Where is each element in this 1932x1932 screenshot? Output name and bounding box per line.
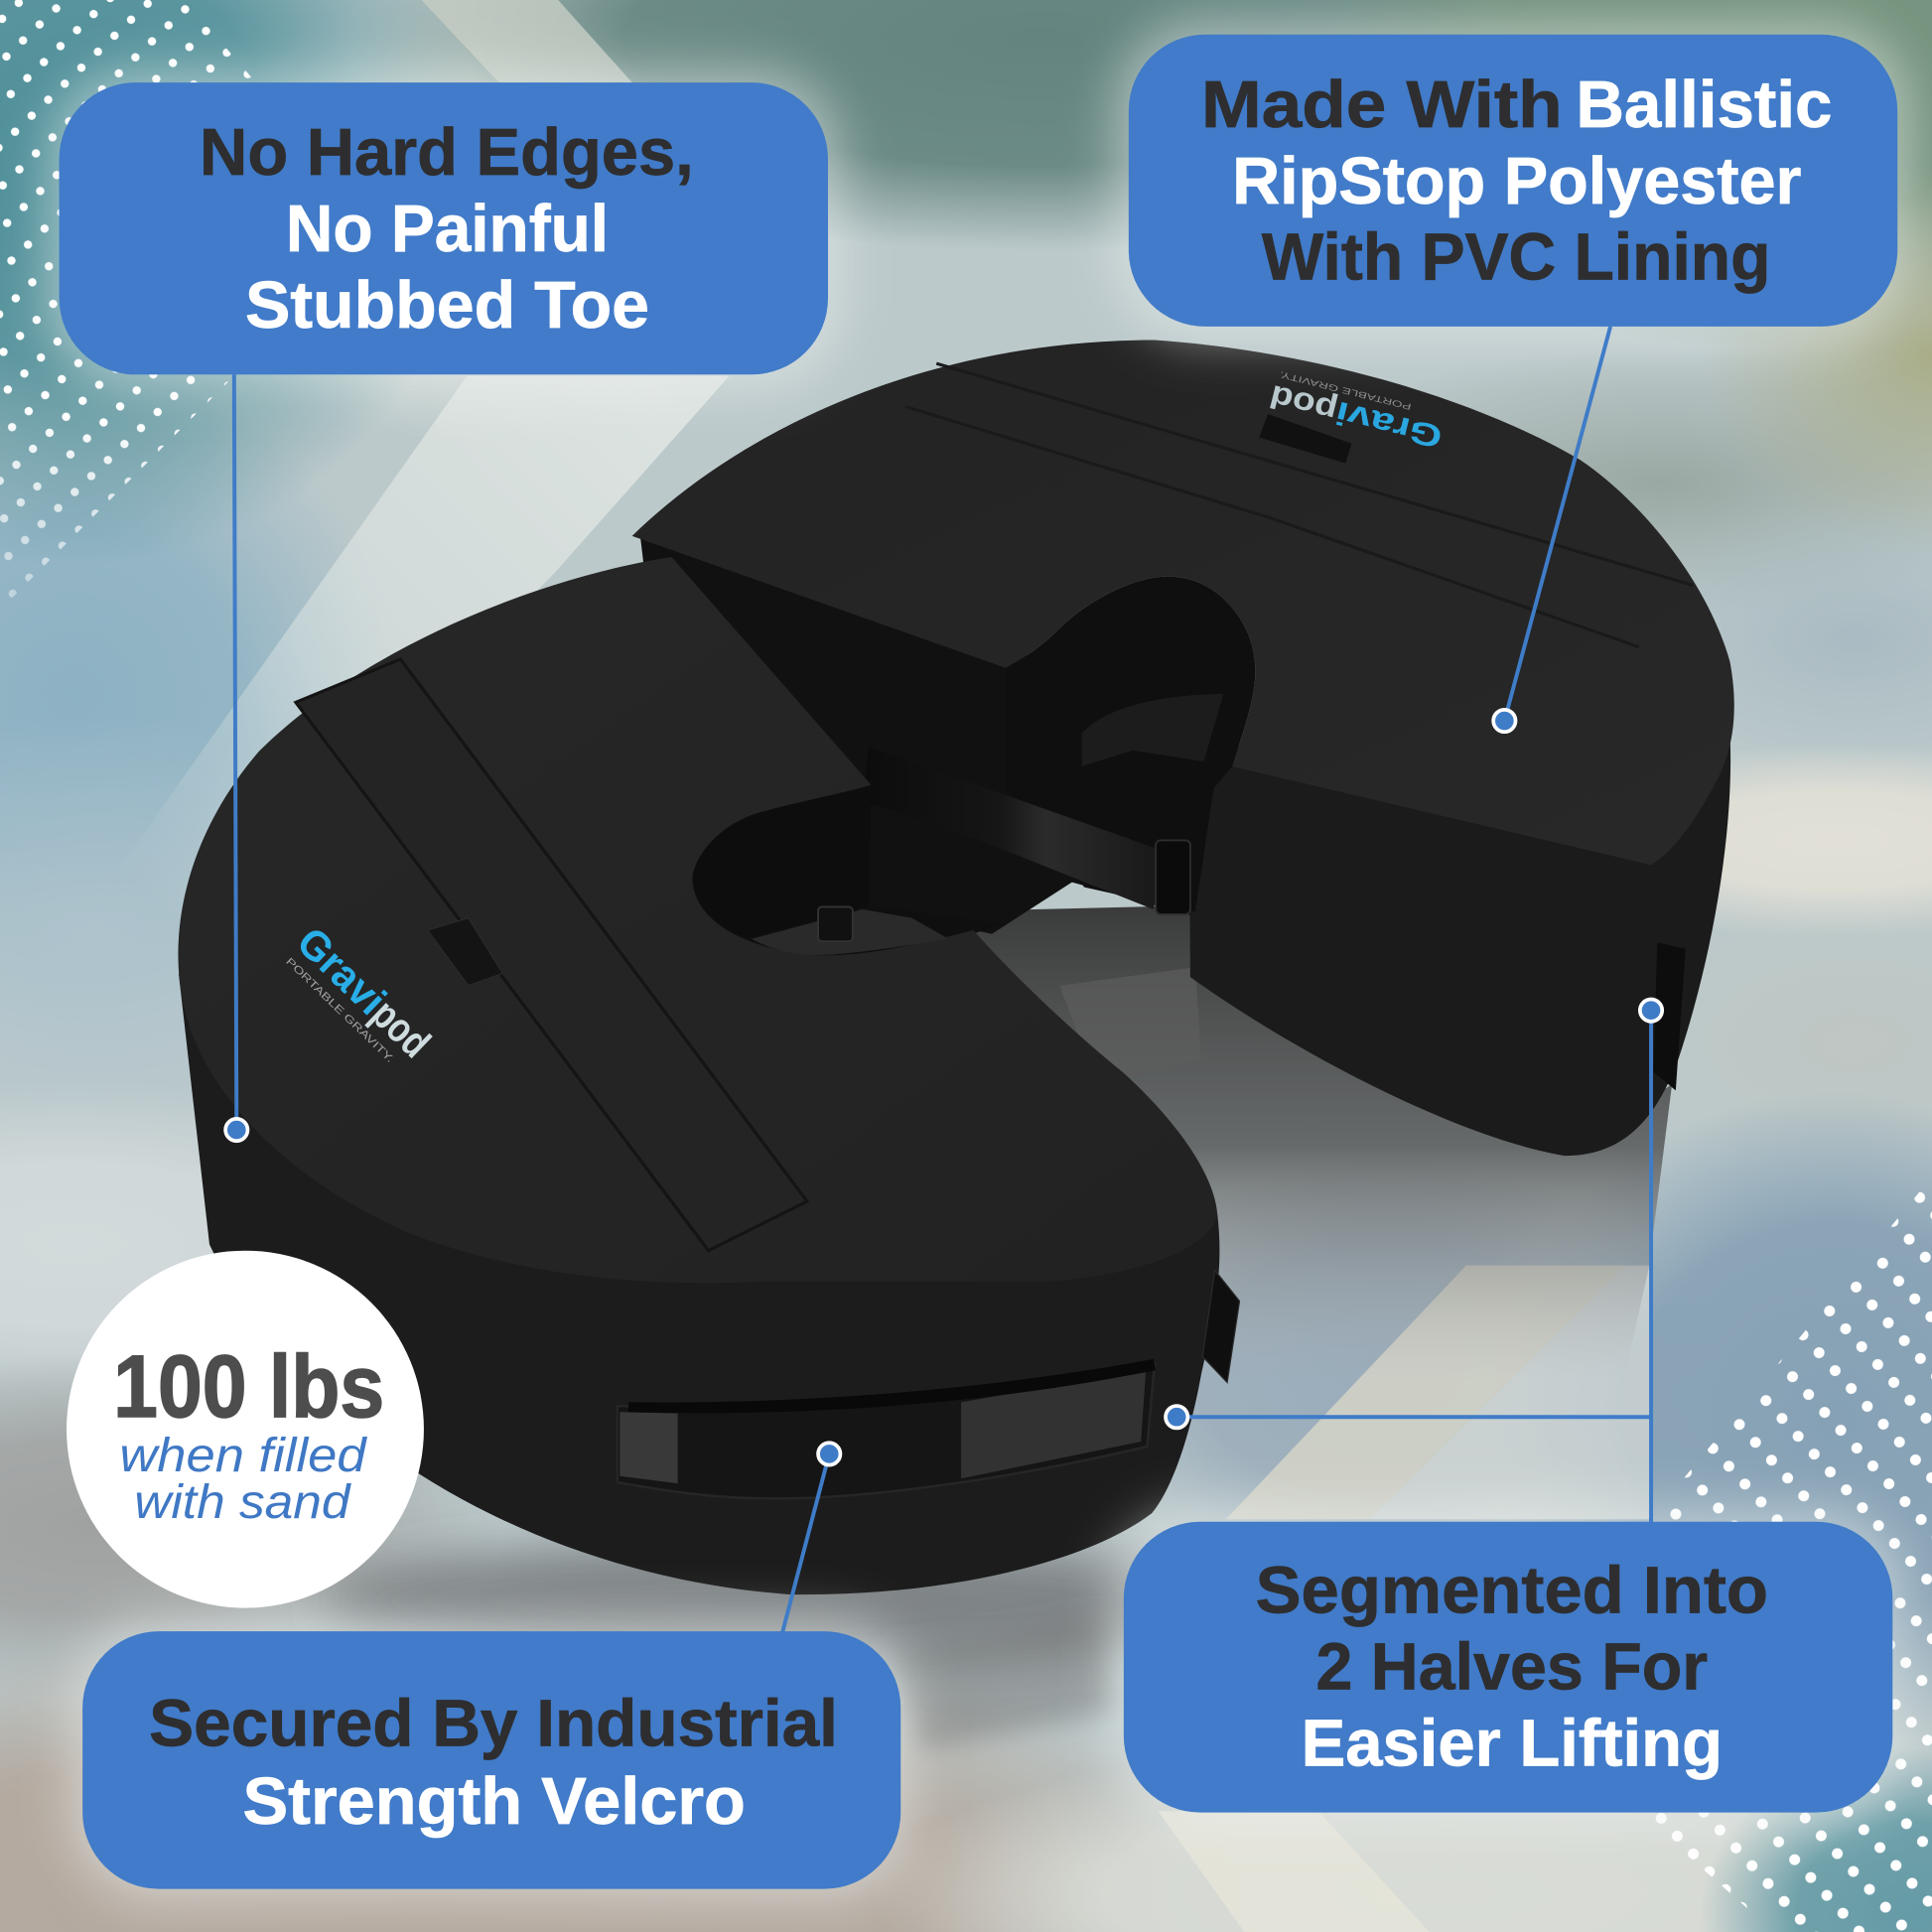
callout marker dots — [225, 710, 1662, 1465]
left pod hole — [692, 785, 871, 937]
halftone dots top left — [0, 0, 251, 610]
halftone dots bottom right — [1651, 1176, 1932, 1932]
logo: Gravipod on left pod: Gravi — [288, 918, 395, 1024]
right pod top seam lines — [905, 363, 1693, 647]
logo: Gravipod on left pod: PORTABLE GRAVITY. — [283, 956, 396, 1065]
right pod top surface — [632, 341, 1734, 865]
callout: ballistic ripstop polyester: Made With — [1201, 68, 1563, 142]
callout: no hard edges: No Hard Edges, — [200, 115, 694, 190]
right pod top carry tab — [1259, 414, 1351, 464]
callout: ballistic ripstop polyester: RipStop Polyester — [1232, 144, 1801, 218]
callout: no hard edges: No Painful — [286, 192, 609, 266]
right pod end velcro tab — [1654, 942, 1686, 1090]
callout: industrial velcro: Strength Velcro — [242, 1764, 746, 1839]
right pod inner box face — [639, 530, 1201, 934]
callout: ballistic ripstop polyester — [1129, 35, 1897, 327]
callout: industrial velcro: Secured By Industrial — [149, 1687, 838, 1761]
velcro strap and buckle — [863, 747, 1190, 914]
left pod top surface — [178, 557, 1217, 1283]
background chevron shapes — [123, 0, 1651, 1932]
right pod hole interior — [1006, 577, 1255, 911]
weight badge: 100 lbs — [113, 1336, 384, 1436]
weight badge: with sand — [134, 1475, 352, 1529]
logo: Gravipod on left pod: pod — [362, 990, 440, 1066]
inner hole velcro strip — [1082, 694, 1223, 766]
product: right pod — [632, 341, 1734, 1156]
left pod small carry tab — [428, 918, 502, 986]
callout: no hard edges — [60, 82, 828, 374]
logo: Gravipod on right pod — [1266, 368, 1449, 456]
right pod outer side — [1189, 715, 1730, 1156]
left pod top seam flap — [296, 659, 807, 1251]
callout: industrial velcro — [82, 1631, 900, 1889]
side handle — [618, 1359, 1156, 1498]
weight badge — [67, 1251, 424, 1608]
callout: ballistic ripstop polyester: With PVC Lining — [1262, 220, 1770, 295]
weight badge: when filled — [119, 1429, 368, 1482]
logo: Gravipod on right pod: PORTABLE GRAVITY. — [1279, 369, 1412, 412]
callout: segmented halves: Easier Lifting — [1302, 1706, 1723, 1780]
callout: ballistic ripstop polyester: Ballistic — [1576, 68, 1832, 142]
left pod hole strap and buckle — [752, 906, 949, 955]
side velcro tab — [1202, 1271, 1240, 1382]
callout: segmented halves — [1124, 1522, 1892, 1813]
logo: Gravipod on right pod: pod — [1266, 378, 1340, 429]
callout: segmented halves: Segmented Into — [1256, 1554, 1768, 1628]
callout: segmented halves: 2 Halves For — [1315, 1630, 1708, 1705]
ground shadow and reflection — [321, 905, 1672, 1749]
logo: Gravipod on left pod — [280, 918, 440, 1075]
left pod outer side — [179, 973, 1219, 1594]
callout: no hard edges: Stubbed Toe — [245, 268, 649, 343]
callout leader lines — [234, 327, 1651, 1632]
product: left pod — [178, 557, 1240, 1594]
left pod block face — [653, 557, 1001, 973]
logo: Gravipod on right pod: Gravi — [1332, 394, 1446, 456]
